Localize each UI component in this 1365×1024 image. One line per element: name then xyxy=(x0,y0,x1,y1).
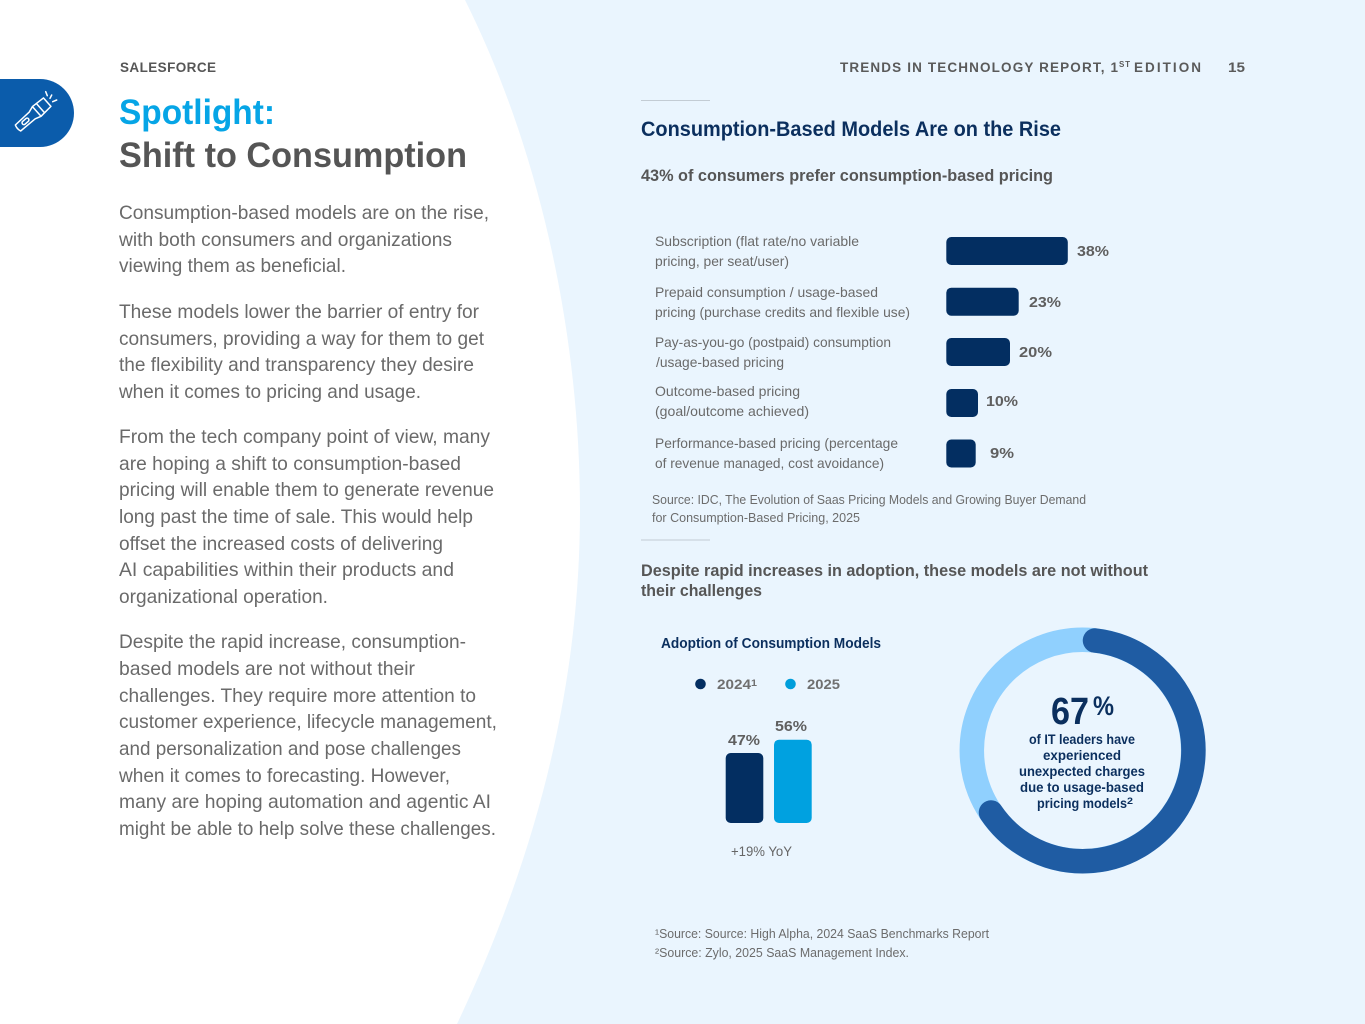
row: prepaid consumption: 23% xyxy=(1029,295,1061,311)
subheading: pricing preference: 43% of consumers prefer consumption-based pricing xyxy=(641,166,1053,185)
curved light blue background panel xyxy=(457,0,1365,1024)
source note: Source: IDC, The Evolution of Saas Pricing Models and Growing Buyer Demand xyxy=(652,492,1086,507)
text block: paragraph 2: These models lower the barrier of entry for xyxy=(119,301,479,323)
bar: 2025: 56% xyxy=(775,719,807,735)
row: subscription xyxy=(655,233,1109,269)
row: subscription: 38% xyxy=(1077,244,1109,260)
subheading: challenges: their challenges xyxy=(641,581,762,600)
report header xyxy=(840,60,1246,75)
bar: 2024 xyxy=(726,733,763,823)
text block: paragraph 1: viewing them as beneficial. xyxy=(119,255,346,277)
report header: EDITION xyxy=(1134,60,1201,75)
row: pay-as-you-go: 20% xyxy=(1019,345,1052,361)
row: outcome-based: (goal/outcome achieved) xyxy=(655,403,809,419)
title: Spotlight: xyxy=(119,93,275,132)
legend: 1 xyxy=(751,678,757,688)
row: pay-as-you-go: Pay-as-you-go (postpaid) consumption xyxy=(655,334,891,350)
text block: paragraph 1 xyxy=(118,202,489,277)
bar chart: adoption of consumption models xyxy=(661,636,881,859)
donut callout text: 2 xyxy=(1127,796,1133,806)
text block: paragraph 2: consumers, providing a way for them to get xyxy=(119,328,485,350)
row: prepaid consumption: Prepaid consumption / usage-based xyxy=(655,284,878,300)
text block: paragraph 1: Consumption-based models are on the rise, xyxy=(119,202,489,224)
subheading: challenges: Despite rapid increases in adoption, these models are not without xyxy=(641,561,1148,580)
row: pay-as-you-go xyxy=(655,334,1052,370)
bar: 2024: 47% xyxy=(728,733,760,749)
row: prepaid consumption: pricing (purchase credits and flexible use) xyxy=(655,304,910,320)
report header: TRENDS IN TECHNOLOGY REPORT, 1 xyxy=(840,60,1118,75)
text block: paragraph 4: many are hoping automation and agentic AI xyxy=(119,791,491,813)
text block: paragraph 4: challenges. They require more attention to xyxy=(119,685,476,707)
text block: paragraph 4: when it comes to forecasting. However, xyxy=(118,765,450,787)
donut callout text: of IT leaders have xyxy=(1029,732,1135,747)
year over year note: +19% YoY xyxy=(731,843,793,859)
text block: paragraph 3: organizational operation. xyxy=(119,586,328,608)
text block: paragraph 3: From the tech company point of view, many xyxy=(119,426,490,448)
text block: paragraph 4: based models are not without their xyxy=(119,658,415,680)
chart title: Adoption of Consumption Models xyxy=(661,636,881,652)
source note: for Consumption-Based Pricing, 2025 xyxy=(652,510,860,525)
report header: 15 xyxy=(1228,60,1246,75)
row: performance-based: Performance-based pricing (percentage xyxy=(655,435,898,451)
footnotes: ²Source: Zylo, 2025 SaaS Management Index. xyxy=(655,945,909,960)
text block: paragraph 3: pricing will enable them to generate revenue xyxy=(119,479,494,501)
legend: 2025 xyxy=(807,676,840,692)
donut callout text: 67 xyxy=(1051,691,1089,733)
bar chart: pricing preference xyxy=(655,233,1109,471)
row: prepaid consumption xyxy=(655,284,1061,320)
text block: paragraph 4: and personalization and pose challenges xyxy=(119,738,461,760)
row: subscription: Subscription (flat rate/no variable xyxy=(655,233,859,249)
donut callout text: due to usage-based xyxy=(1020,780,1144,795)
text block: paragraph 3: AI capabilities within their products and xyxy=(119,559,454,581)
source note xyxy=(652,492,1086,525)
bar: 2025 xyxy=(774,719,812,823)
section heading: Consumption-Based Models Are on the Rise xyxy=(641,118,1061,141)
row: outcome-based xyxy=(655,383,1018,419)
report header: ST xyxy=(1119,60,1130,69)
text block: paragraph 3: offset the increased costs of delivering xyxy=(119,533,443,555)
text block: paragraph 4 xyxy=(118,631,497,840)
row: performance-based: of revenue managed, cost avoidance) xyxy=(655,455,884,471)
text block: paragraph 4: customer experience, lifecycle management, xyxy=(119,711,497,733)
footnotes: ¹Source: Source: High Alpha, 2024 SaaS Benchmarks Report xyxy=(655,926,989,941)
donut callout text: pricing models xyxy=(1037,796,1127,811)
row: performance-based: 9% xyxy=(990,446,1014,462)
row: performance-based xyxy=(655,435,1014,471)
row: outcome-based: 10% xyxy=(986,394,1018,410)
text block: paragraph 2: the flexibility and transparency they desire xyxy=(119,354,474,376)
text block: paragraph 1: with both consumers and organizations xyxy=(118,229,452,251)
text block: paragraph 3: long past the time of sale. This would help xyxy=(119,506,473,528)
row: outcome-based: Outcome-based pricing xyxy=(655,383,800,399)
text block: paragraph 2 xyxy=(118,301,485,403)
donut callout text xyxy=(1019,691,1145,811)
footnotes xyxy=(655,926,989,960)
donut callout text: experienced xyxy=(1043,748,1121,763)
text block: paragraph 3 xyxy=(119,426,494,608)
legend xyxy=(695,676,840,692)
brand label: SALESFORCE xyxy=(120,60,216,75)
legend: 2024 xyxy=(717,676,751,692)
row: pay-as-you-go: /usage-based pricing xyxy=(656,354,784,370)
title xyxy=(119,93,467,175)
text block: paragraph 2: when it comes to pricing and usage. xyxy=(118,381,421,403)
text block: paragraph 3: are hoping a shift to consumption-based xyxy=(119,453,461,475)
subheading: challenges xyxy=(641,561,1148,600)
title: Shift to Consumption xyxy=(119,136,467,175)
donut chart: 67% xyxy=(972,640,1193,861)
donut callout text: unexpected charges xyxy=(1019,764,1145,779)
row: subscription: pricing, per seat/user) xyxy=(655,253,789,269)
donut callout text: % xyxy=(1093,691,1114,721)
text block: paragraph 4: Despite the rapid increase, consumption- xyxy=(119,631,466,653)
icon: flashlight badge xyxy=(0,79,74,147)
text block: paragraph 4: might be able to help solve these challenges. xyxy=(119,818,496,840)
